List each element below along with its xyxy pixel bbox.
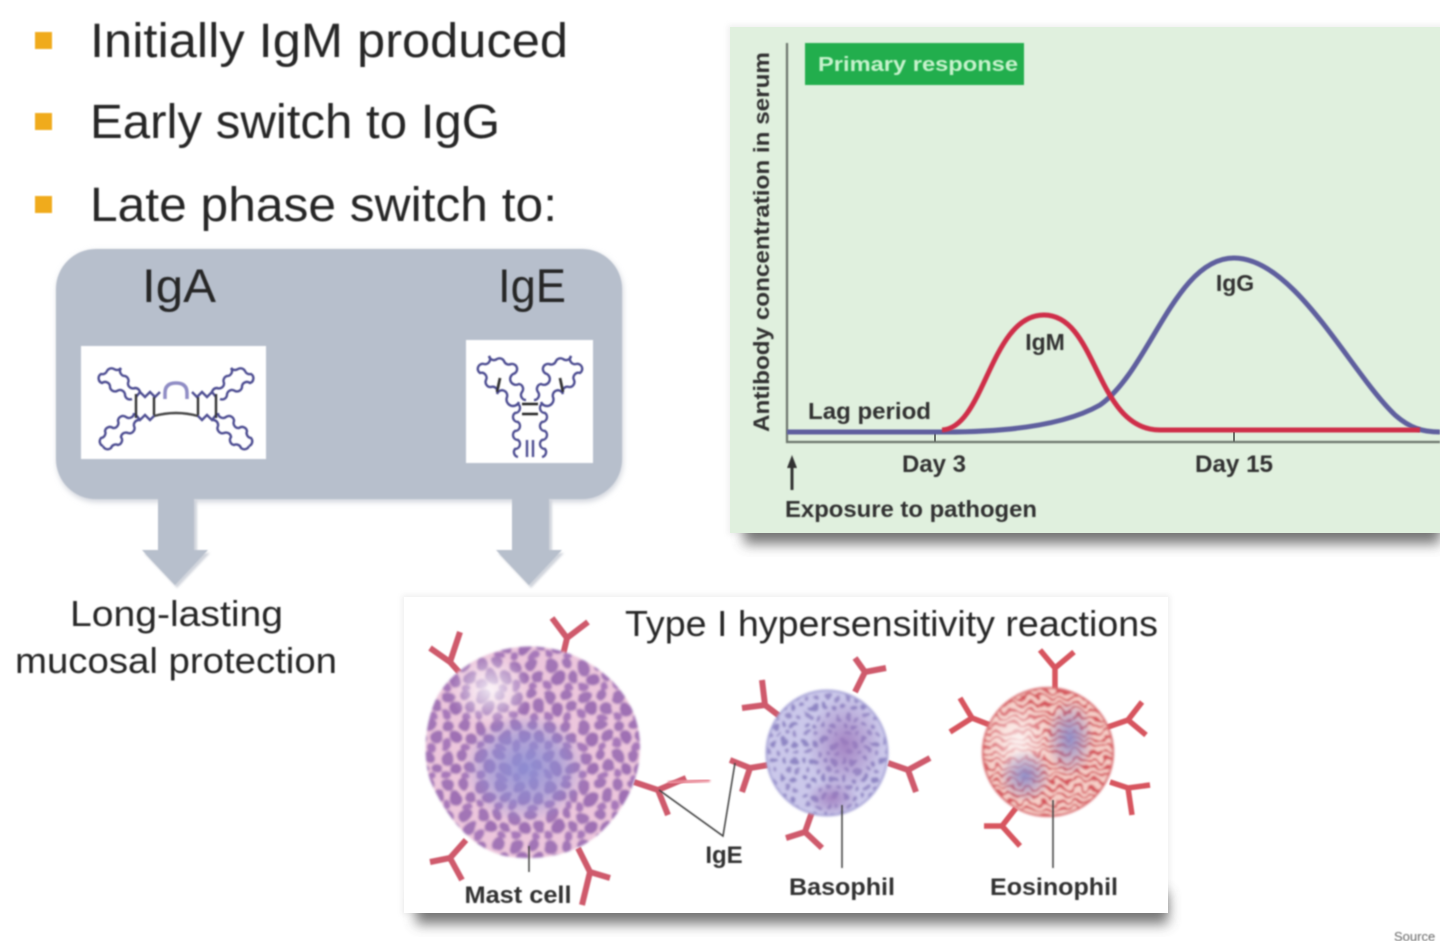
label: basophil: Basophil <box>789 874 895 901</box>
label: lag period: Lag period <box>808 398 931 424</box>
bullet: IgG: Early switch to IgG <box>90 96 500 149</box>
faded antibody arm <box>668 780 710 783</box>
label: eosinophil: Eosinophil <box>990 874 1118 901</box>
cell: eosinophil <box>980 685 1116 819</box>
curve: IgG <box>787 258 1440 432</box>
cell: mast cell <box>424 644 642 860</box>
label: IgM: IgM <box>1025 329 1065 355</box>
text block: IgA outcome: mucosal protection <box>15 640 337 681</box>
heading: type I hypersensitivity: Type I hypersensitivity reactions <box>625 603 1158 644</box>
y axis label: Antibody concentration in serum <box>749 52 774 432</box>
label: IgG: IgG <box>1216 270 1254 296</box>
label: primary response <box>805 43 1024 85</box>
arrow: IgE down <box>496 497 562 585</box>
label: day 3: Day 3 <box>902 451 966 478</box>
antibodies: basophil <box>730 658 930 848</box>
label: primary response: Primary response <box>818 54 1018 76</box>
label: IgE: IgE <box>705 842 743 869</box>
cell: basophil <box>764 688 890 818</box>
icon: IgE monomer <box>466 340 593 463</box>
axes <box>787 43 1440 442</box>
panel: Type I hypersensitivity <box>400 595 1170 924</box>
antibodies: eosinophil <box>950 650 1150 846</box>
label: day 15: Day 15 <box>1195 451 1273 478</box>
icon: IgA dimer <box>81 346 266 459</box>
label: exposure: Exposure to pathogen <box>785 496 1037 522</box>
bullet list <box>35 15 568 232</box>
bullet: IgM: Initially IgM produced <box>90 15 568 68</box>
arrow: exposure <box>787 455 797 490</box>
panel: primary response chart <box>728 25 1440 544</box>
bullet: late phase: Late phase switch to: <box>90 179 557 232</box>
panel: late phase isotypes <box>56 249 623 588</box>
curve: IgM <box>942 315 1420 430</box>
antibodies: mast cell <box>430 618 686 905</box>
heading: IgA: IgA <box>142 259 217 312</box>
label: mast cell: Mast cell <box>464 882 572 909</box>
arrow: IgA down <box>142 497 208 585</box>
text block: IgA outcome <box>15 593 337 681</box>
heading: IgE: IgE <box>498 259 566 312</box>
text block: IgA outcome: Long-lasting <box>70 593 283 634</box>
leader lines <box>529 763 1053 872</box>
